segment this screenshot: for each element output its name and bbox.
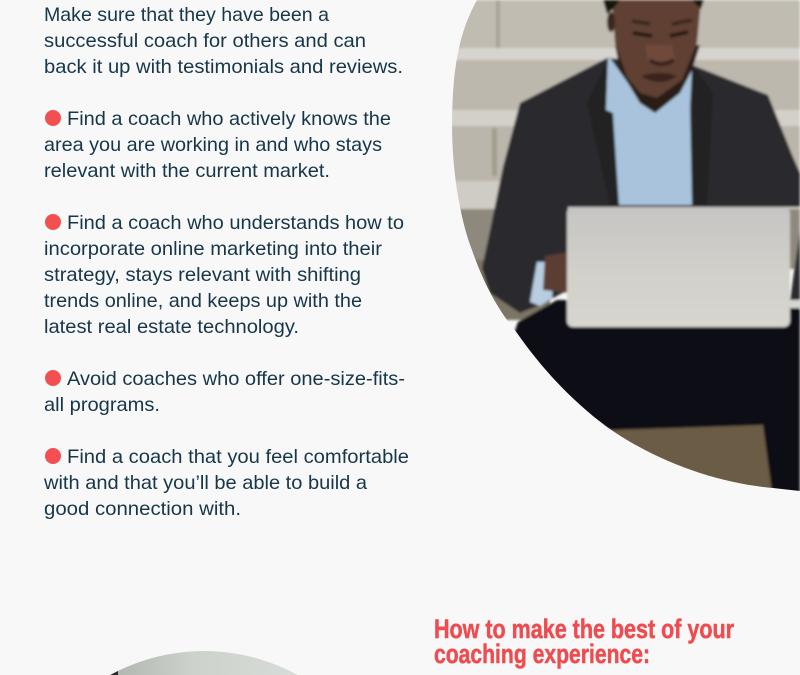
body text: coach selection tips — [43, 4, 409, 520]
photo: lower circular image — [110, 651, 298, 675]
tip 5: Find a coach that you feel comfortable — [67, 446, 409, 468]
tip 4: all programs. — [44, 394, 160, 416]
tip 3: latest real estate technology. — [44, 316, 299, 338]
tip 3: strategy, stays relevant with shifting — [44, 264, 361, 286]
tip 5: good connection with. — [44, 498, 241, 520]
face — [612, 0, 701, 98]
tip 1 continuation: Make sure that they have been a — [44, 4, 329, 26]
tip 2: Find a coach who actively knows the — [67, 108, 391, 130]
tip 1 continuation: successful coach for others and can — [44, 30, 366, 52]
tip 1 continuation — [44, 4, 403, 78]
tip 2: area you are working in and who stays — [44, 134, 382, 156]
stone steps — [450, 0, 800, 320]
shirt cuff — [530, 262, 555, 306]
lapel shading — [587, 60, 713, 205]
hand — [543, 252, 570, 293]
tip 4: Avoid coaches who offer one-size-fits- — [67, 368, 405, 390]
nose and mouth — [650, 60, 674, 64]
laptop — [567, 207, 790, 327]
shirt — [606, 55, 692, 205]
hair — [603, 0, 704, 14]
jacket — [482, 58, 800, 313]
eyes and brows — [632, 20, 692, 24]
ear — [607, 12, 615, 32]
heading: how to make the best of your coaching experience: coaching experience: — [434, 639, 650, 669]
cheek and nose highlights — [645, 45, 676, 62]
tip 5: with and that you’ll be able to build a — [43, 472, 367, 494]
neck and undershirt — [615, 45, 700, 113]
heading: how to make the best of your coaching experience — [434, 614, 734, 669]
right shirt cuff — [786, 300, 800, 308]
tip 3 — [44, 212, 404, 338]
tip 5 — [43, 446, 409, 520]
tip 3: trends online, and keeps up with the — [44, 290, 362, 312]
tip 2: relevant with the current market. — [44, 160, 330, 182]
tip 3: incorporate online marketing into their — [44, 238, 383, 260]
wooden floor — [590, 425, 775, 495]
heading: how to make the best of your coaching experience: How to make the best of your — [434, 614, 734, 644]
tip 4 — [44, 368, 405, 416]
trousers — [510, 300, 800, 495]
tip 1 continuation: back it up with testimonials and reviews. — [44, 56, 403, 78]
photo: man in suit working on laptop — [450, 0, 800, 495]
tip 3: Find a coach who understands how to — [67, 212, 404, 234]
tip 2 — [44, 108, 391, 182]
